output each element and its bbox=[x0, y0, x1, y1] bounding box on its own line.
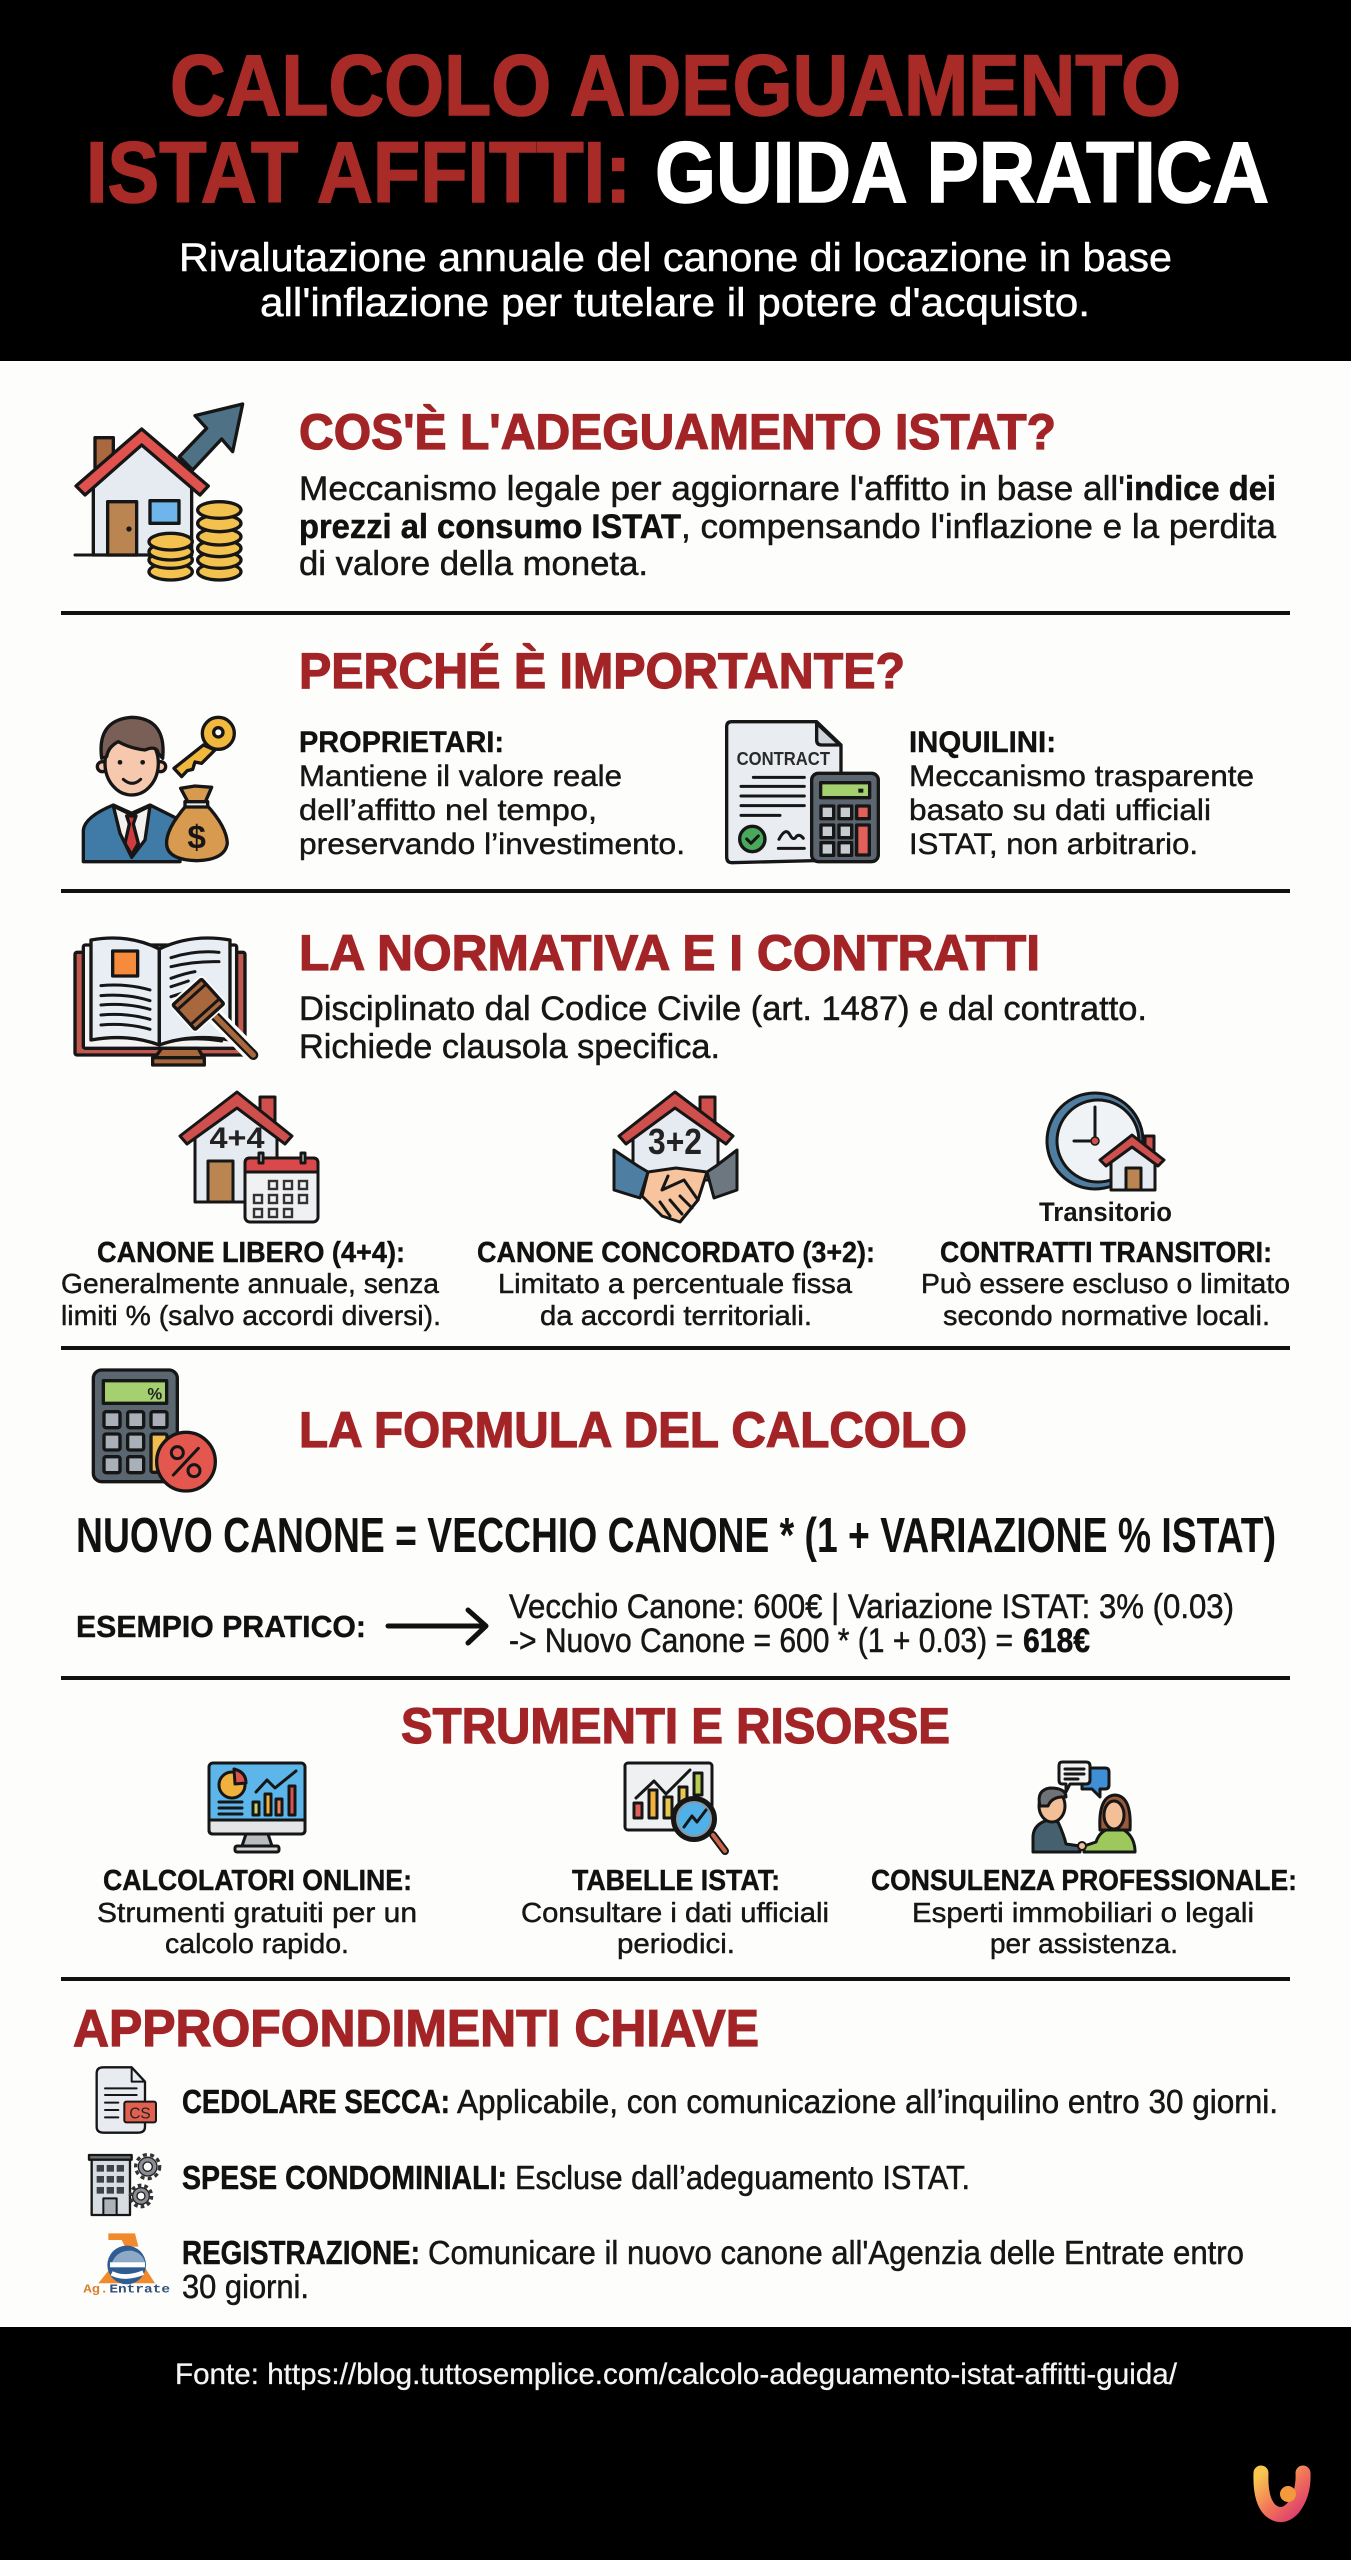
text: canone libero: Generalmente annuale, senza bbox=[61, 1268, 439, 1299]
icon: owner with key and money bag bbox=[83, 717, 234, 862]
text: canone concordato: Limitato a percentuale fissa bbox=[498, 1268, 852, 1299]
title: ISTAT AFFITTI: bbox=[86, 125, 631, 221]
text: proprietari: dell’affitto nel tempo, bbox=[299, 794, 597, 827]
icon: house 4+4 with calendar: 4+4 bbox=[210, 1122, 265, 1155]
heading: COS'È L'ADEGUAMENTO ISTAT? bbox=[299, 404, 1056, 460]
text: spese condominiali: SPESE CONDOMINIALI: bbox=[182, 2159, 507, 2196]
header: title and subtitle bbox=[86, 38, 1269, 325]
text: inquilini bbox=[909, 726, 1254, 861]
text: canone libero bbox=[61, 1237, 441, 1331]
text: consulenza professionale: CONSULENZA PROFESSIONALE: bbox=[871, 1865, 1297, 1897]
text: tabelle istat: TABELLE ISTAT: bbox=[572, 1865, 780, 1897]
text: tabelle istat: Consultare i dati ufficiali bbox=[521, 1897, 829, 1928]
panel: perché è importante bbox=[83, 643, 1254, 863]
example text: -> Nuovo Canone = 600 * (1 + 0.03) = bbox=[509, 1622, 1013, 1660]
text: inquilini: INQUILINI: bbox=[909, 726, 1056, 759]
icon: house 4+4 with calendar bbox=[180, 1092, 318, 1222]
icon: brand logo bbox=[1261, 2473, 1303, 2515]
text: consulenza professionale: per assistenza. bbox=[990, 1928, 1178, 1959]
heading: LA NORMATIVA E I CONTRATTI bbox=[299, 925, 1040, 981]
icon: cedolare secca document bbox=[97, 2067, 156, 2133]
example text: 618€ bbox=[1023, 1622, 1090, 1660]
panel: approfondimenti chiave bbox=[73, 2000, 1278, 2305]
panel: strumenti e risorse bbox=[97, 1698, 1297, 1959]
subtitle bbox=[179, 236, 1172, 325]
text: spese condominiali bbox=[182, 2159, 970, 2196]
body text bbox=[299, 470, 1276, 583]
icon: house 3+2 with handshake: 3+2 bbox=[648, 1121, 702, 1162]
footer source: Fonte: https://blog.tuttosemplice.com/calcolo-adeguamento-istat-affitti-guida/ bbox=[175, 2358, 1178, 2391]
text: tabelle istat bbox=[521, 1865, 829, 1959]
body text: Disciplinato dal Codice Civile (art. 1487) e dal contratto. bbox=[299, 990, 1147, 1028]
icon: calculator with percent: % bbox=[147, 1384, 162, 1403]
text: inquilini: basato su dati ufficiali bbox=[909, 794, 1211, 827]
arrow bbox=[388, 1610, 486, 1643]
body text: prezzi al consumo ISTAT bbox=[299, 508, 681, 546]
text: canone concordato bbox=[477, 1237, 875, 1331]
body text: Meccanismo legale per aggiornare l'affitto in base all' bbox=[299, 470, 1125, 508]
body text: , compensando l'inflazione e la perdita bbox=[681, 508, 1276, 546]
text: calcolatori online bbox=[97, 1865, 417, 1959]
text: calcolatori online: CALCOLATORI ONLINE: bbox=[103, 1865, 412, 1897]
body text: di valore della moneta. bbox=[299, 545, 648, 583]
heading: APPROFONDIMENTI CHIAVE bbox=[73, 2000, 759, 2058]
icon: agenzia entrate logo: Entrate bbox=[109, 2283, 170, 2297]
icon label: transitorio: Transitorio bbox=[1039, 1197, 1172, 1227]
text: registrazione: 30 giorni. bbox=[182, 2268, 309, 2305]
text: contratti transitori: Può essere escluso o limitato bbox=[921, 1268, 1290, 1299]
title bbox=[86, 38, 1269, 221]
icon: consultation bbox=[1033, 1762, 1135, 1852]
text: canone libero: CANONE LIBERO (4+4): bbox=[97, 1237, 405, 1269]
example text: Vecchio Canone: 600€ | Variazione ISTAT: 3% (0.03) bbox=[509, 1588, 1234, 1626]
text: registrazione: Comunicare il nuovo canone all'Agenzia delle Entrate entro bbox=[428, 2234, 1244, 2271]
subtitle: Rivalutazione annuale del canone di locazione in base bbox=[179, 236, 1172, 280]
text: inquilini: Meccanismo trasparente bbox=[909, 760, 1254, 793]
text: cedolare secca: CEDOLARE SECCA: bbox=[182, 2083, 450, 2120]
text: registrazione: REGISTRAZIONE: bbox=[182, 2234, 420, 2271]
panel: la normativa e i contratti bbox=[61, 925, 1290, 1331]
subtitle: all'inflazione per tutelare il potere d'acquisto. bbox=[260, 281, 1090, 325]
icon: agenzia entrate logo bbox=[83, 2233, 170, 2297]
heading: LA FORMULA DEL CALCOLO bbox=[299, 1402, 967, 1458]
icon: contract and calculator bbox=[727, 722, 878, 863]
text: proprietari bbox=[299, 726, 685, 861]
text: consulenza professionale bbox=[871, 1865, 1297, 1959]
panel: cos'è l'adeguamento bbox=[75, 404, 1276, 583]
text: contratti transitori: secondo normative locali. bbox=[943, 1300, 1270, 1331]
title: GUIDA PRATICA bbox=[655, 125, 1269, 221]
example label: ESEMPIO PRATICO: bbox=[76, 1609, 366, 1644]
text: spese condominiali: Escluse dall’adeguamento ISTAT. bbox=[515, 2159, 970, 2196]
text: canone concordato: CANONE CONCORDATO (3+2): bbox=[477, 1237, 875, 1269]
example text bbox=[509, 1588, 1234, 1660]
text: canone libero: limiti % (salvo accordi diversi). bbox=[61, 1300, 441, 1331]
icon: chart with magnifier bbox=[625, 1763, 725, 1851]
body text: Richiede clausola specifica. bbox=[299, 1028, 720, 1066]
text: contratti transitori: CONTRATTI TRANSITORI: bbox=[940, 1237, 1272, 1269]
body text: indice dei bbox=[1125, 470, 1276, 508]
heading: PERCHÉ È IMPORTANTE? bbox=[299, 643, 905, 699]
heading: STRUMENTI E RISORSE bbox=[401, 1698, 950, 1754]
icon: calculator with percent bbox=[93, 1370, 215, 1491]
panel: la formula del calcolo bbox=[76, 1370, 1276, 1660]
text: canone concordato: da accordi territoriali. bbox=[540, 1300, 812, 1331]
icon: house with arrow and coins bbox=[75, 404, 243, 580]
icon: house 3+2 with handshake bbox=[614, 1092, 737, 1222]
title: CALCOLO ADEGUAMENTO bbox=[170, 38, 1181, 134]
text: proprietari: PROPRIETARI: bbox=[299, 726, 504, 759]
text: registrazione bbox=[182, 2234, 1244, 2305]
icon: book and gavel bbox=[75, 938, 255, 1065]
icon: monitor bbox=[209, 1763, 305, 1852]
icon: clock with house bbox=[1047, 1093, 1164, 1190]
icon: cedolare secca document: CS bbox=[129, 2105, 151, 2122]
text: cedolare secca: Applicabile, con comunicazione all’inquilino entro 30 giorni. bbox=[457, 2083, 1278, 2120]
text: consulenza professionale: Esperti immobiliari o legali bbox=[912, 1897, 1254, 1928]
text: inquilini: ISTAT, non arbitrario. bbox=[909, 828, 1198, 861]
icon: owner with key and money bag: $ bbox=[187, 819, 206, 856]
text: contratti transitori bbox=[921, 1237, 1290, 1331]
text: calcolatori online: Strumenti gratuiti per un bbox=[97, 1897, 417, 1928]
icon: contract and calculator: CONTRACT bbox=[737, 748, 831, 769]
text: calcolatori online: calcolo rapido. bbox=[165, 1928, 349, 1959]
icon: agenzia entrate logo: Ag. bbox=[83, 2283, 108, 2297]
icon: building with gears bbox=[89, 2155, 160, 2215]
body text bbox=[299, 990, 1147, 1066]
text: proprietari: Mantiene il valore reale bbox=[299, 760, 622, 793]
text: proprietari: preservando l’investimento. bbox=[299, 828, 685, 861]
text: tabelle istat: periodici. bbox=[617, 1928, 735, 1959]
